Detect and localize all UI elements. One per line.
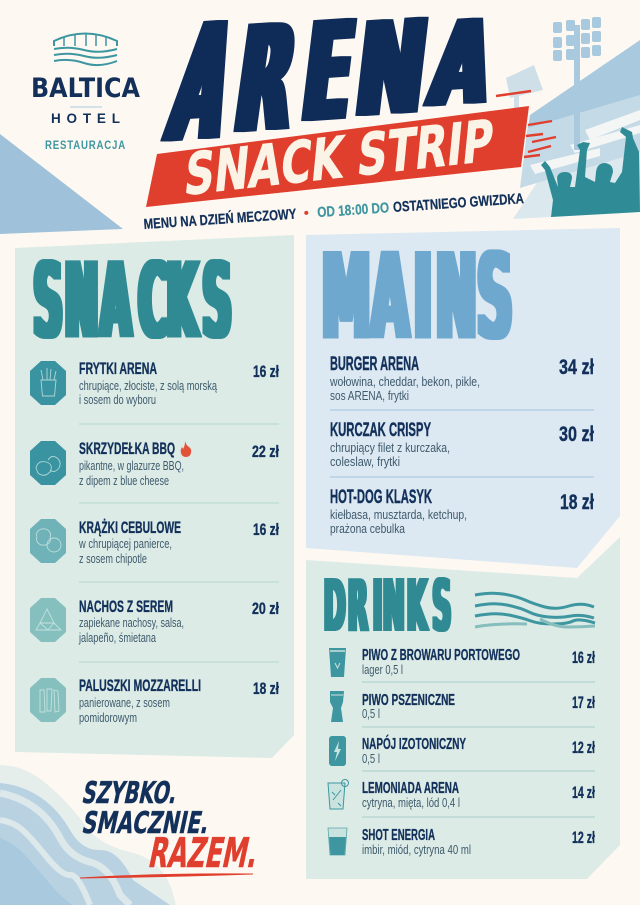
item: krążki: z sosem chipotle <box>79 552 147 566</box>
floodlight small <box>506 65 543 112</box>
slogan <box>79 776 263 878</box>
red strip <box>146 106 529 207</box>
item: kurczak: KURCZAK CRISPY <box>330 420 431 441</box>
waves <box>475 593 595 627</box>
item: napój: NAPÓJ IZOTONICZNY <box>362 735 466 753</box>
item: krążki: KRĄŻKI CEBULOWE <box>79 518 181 537</box>
stadium illustration <box>496 17 640 219</box>
item: skrzydełka: 22 zł <box>252 442 279 461</box>
item: nachos: jalapeño, śmietana <box>78 631 156 645</box>
item: hot-dog: kiełbasa, musztarda, ketchup, <box>330 508 467 522</box>
mains background <box>306 228 620 568</box>
logo: Baltica Hotel <box>31 33 140 152</box>
item: hot-dog: prażona cebulka <box>330 522 405 536</box>
item: nachos <box>30 597 279 645</box>
item: nachos: NACHOS Z SEREM <box>79 597 173 616</box>
item: lemoniada <box>328 780 595 810</box>
item: burger: BURGER ARENA <box>330 354 419 375</box>
crowd silhouettes <box>541 127 640 217</box>
snacks heading: SNACKS <box>34 240 231 362</box>
item: krążki <box>30 518 279 566</box>
tagline: MENU NA DZIEŃ MECZOWY <box>143 206 297 233</box>
item: frytki: chrupiące, złociste, z solą morską <box>79 379 217 393</box>
light stand stripes <box>585 110 640 140</box>
item: shot: SHOT ENERGIA <box>362 827 435 844</box>
item: nachos: zapiekane nachosy, salsa, <box>79 616 184 630</box>
panel: snacks <box>15 235 294 758</box>
icon: can <box>329 736 346 766</box>
item: lemoniada: cytryna, mięta, lód 0,4 l <box>362 796 460 810</box>
item: burger: sos ARENA, frytki <box>330 389 409 403</box>
icon: bridge and waves <box>54 33 117 65</box>
icon: mozzarella sticks <box>30 678 66 722</box>
decorative bottom-left waves <box>0 765 176 905</box>
item: burger <box>329 354 594 403</box>
item: napój <box>329 735 595 766</box>
slogan: SMACZNIE. <box>79 806 213 841</box>
item: piwo pszeniczne: 0,5 l <box>362 707 380 721</box>
item: skrzydełka <box>30 439 279 488</box>
item: paluszki: pomidorowym <box>79 711 137 725</box>
item: lemoniada: 14 zł <box>572 783 595 802</box>
item: paluszki: panierowane, z sosem <box>79 696 170 710</box>
item: piwo portowe: lager 0,5 l <box>362 663 403 677</box>
item: piwo pszeniczne <box>330 691 595 722</box>
item: shot: 12 zł <box>572 828 595 847</box>
icon: lemonade <box>328 780 348 809</box>
item: hot-dog <box>330 487 594 536</box>
icon: fries <box>30 361 66 405</box>
icon: beer glass <box>329 648 346 677</box>
mains heading: MAINS <box>322 229 512 367</box>
item: hot-dog: HOT-DOG KLASYK <box>330 487 432 508</box>
item: shot <box>328 827 595 857</box>
item: kurczak: coleslaw, frytki <box>330 455 400 469</box>
tagline <box>143 190 525 233</box>
floodlight large <box>553 17 601 150</box>
title: ARENA <box>157 0 502 180</box>
decorative triangle <box>0 134 123 234</box>
item: piwo pszeniczne: 17 zł <box>572 693 595 712</box>
item: kurczak <box>330 420 594 469</box>
slogan: RAZEM. <box>145 829 263 877</box>
item: nachos: 20 zł <box>252 599 279 618</box>
item: paluszki: PALUSZKI MOZZARELLI <box>79 676 201 695</box>
slogan: SZYBKO. <box>79 776 181 811</box>
item: frytki: 16 zł <box>253 362 279 381</box>
panel: drinks <box>306 537 620 879</box>
item: piwo portowe: 16 zł <box>572 648 595 667</box>
item: skrzydełka: pikantne, w glazurze BBQ, <box>79 459 184 473</box>
brand name: BALTICA <box>31 73 140 104</box>
item: napój: 0,5 l <box>362 752 380 766</box>
item: kurczak: chrupiący filet z kurczaka, <box>330 441 450 455</box>
tagline: OD 18:00 DO <box>317 200 390 221</box>
underline stroke <box>80 874 253 878</box>
divider under brand <box>70 106 102 108</box>
panel: mains <box>306 228 620 568</box>
item: piwo portowe <box>329 647 595 677</box>
drinks background <box>306 537 620 879</box>
icon: shot glass <box>328 828 347 855</box>
drinks heading: DRINKS <box>324 564 451 648</box>
roof band <box>528 40 640 128</box>
tagline: OSTATNIEGO GWIZDKA <box>393 191 525 216</box>
item: shot: imbir, miód, cytryna 40 ml <box>362 843 471 857</box>
banner text: SNACK STRIP <box>182 106 496 209</box>
item: krążki: w chrupiącej panierce, <box>78 537 172 551</box>
item: frytki: i sosem do wyboru <box>79 393 156 407</box>
icon: wheat beer glass <box>330 691 344 722</box>
item: burger: wołowina, cheddar, bekon, pikle, <box>329 375 480 389</box>
snacks background <box>15 235 294 758</box>
item: lemoniada: LEMONIADA ARENA <box>362 780 459 797</box>
hotel label: HOTEL <box>51 111 120 126</box>
item: krążki: 16 zł <box>253 520 279 539</box>
icon: onion rings <box>30 519 66 563</box>
item: frytki: FRYTKI ARENA <box>79 359 157 378</box>
icon: flame <box>181 441 191 457</box>
item: kurczak: 30 zł <box>559 423 594 446</box>
item: piwo pszeniczne: PIWO PSZENICZNE <box>362 692 455 709</box>
item: frytki <box>30 359 279 407</box>
item: napój: 12 zł <box>572 738 595 757</box>
item: skrzydełka: z dipem z blue cheese <box>79 474 169 488</box>
item: paluszki: 18 zł <box>253 679 279 698</box>
restaurant label: RESTAURACJA <box>45 138 126 152</box>
banner: snack strip <box>146 106 529 209</box>
icon: nachos <box>30 598 66 642</box>
item: piwo portowe: PIWO Z BROWARU PORTOWEGO <box>362 647 520 664</box>
speed lines <box>496 91 556 157</box>
item: skrzydełka: SKRZYDEŁKA BBQ <box>79 439 175 458</box>
icon: wings <box>30 441 66 485</box>
stand background <box>513 145 640 219</box>
item: paluszki <box>30 676 279 725</box>
item: hot-dog: 18 zł <box>560 491 594 514</box>
item: burger: 34 zł <box>559 356 594 379</box>
